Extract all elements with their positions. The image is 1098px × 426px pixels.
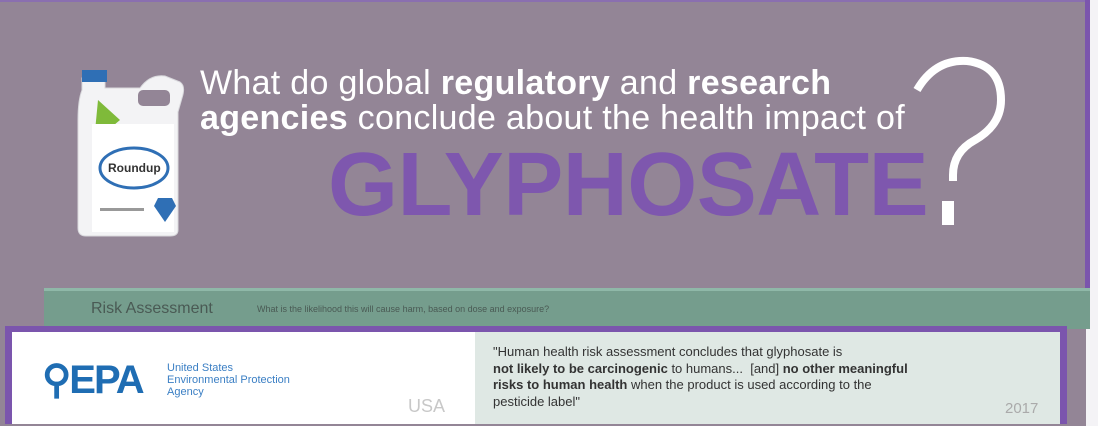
text: USA: USA — [408, 396, 445, 416]
text: agency name: Agency — [167, 386, 204, 398]
title — [200, 64, 905, 137]
text: agency name: Environmental Protection — [167, 374, 290, 386]
text: quote: risks to human health when the product is used according to the — [493, 377, 872, 392]
icon: Roundup bottle: Roundup — [108, 161, 161, 175]
icon: question mark — [914, 56, 1005, 225]
panel: EPA logo — [12, 332, 475, 424]
heading: GLYPHOSATE: GLYPHOSATE — [328, 135, 928, 235]
icon: EPA logo: ⚲EPA — [42, 358, 143, 402]
text: year: 2017 — [1005, 400, 1038, 417]
panel: quote — [475, 332, 1060, 424]
text: quote: pesticide label" — [493, 394, 580, 408]
bar: Risk Assessment: What is the likelihood this will cause harm, based on dose and exposure? — [257, 304, 549, 314]
purple frame — [5, 326, 1067, 424]
bar: Risk Assessment: Risk Assessment — [91, 300, 213, 317]
right purple border — [1085, 0, 1090, 290]
bar: Risk Assessment — [44, 288, 1090, 329]
title: agencies conclude about the health impact of — [200, 99, 905, 137]
text: quote: not likely to be carcinogenic to humans... [and] no other meaningful — [493, 360, 908, 376]
text: quote: "Human health risk assessment concludes that glyphosate is — [493, 344, 842, 359]
title: What do global regulatory and research — [200, 64, 831, 102]
text: quote — [493, 344, 908, 408]
text: agency name — [167, 362, 290, 398]
text: agency name: United States — [167, 362, 233, 374]
icon: Roundup bottle — [78, 70, 184, 236]
